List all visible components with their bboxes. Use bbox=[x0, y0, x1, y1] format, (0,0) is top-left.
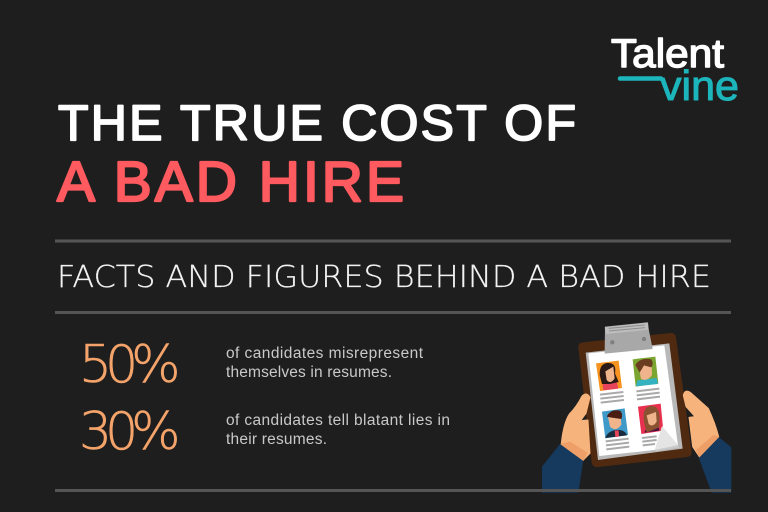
statistic: 30 percent bbox=[79, 402, 450, 462]
logo: Talent Vine bbox=[611, 32, 739, 109]
paper bbox=[588, 345, 678, 456]
illustration: hands holding clipboard of resumes bbox=[542, 322, 731, 493]
divider bottom bbox=[55, 489, 731, 492]
statistic: 30 percent: of candidates tell blatant lies in bbox=[226, 412, 450, 429]
statistic: 50 percent: of candidates misrepresent bbox=[226, 345, 424, 362]
clipboard board bbox=[578, 333, 692, 467]
page curl bbox=[655, 426, 678, 450]
portrait: man green bbox=[633, 357, 658, 387]
statistic: 50 percent: 50% bbox=[79, 335, 177, 395]
logo: Talent Vine: Talent bbox=[611, 32, 724, 76]
left hand bbox=[561, 394, 590, 460]
divider middle bbox=[55, 311, 731, 314]
right hand bbox=[683, 391, 719, 457]
statistic: 30 percent: 30% bbox=[79, 402, 177, 462]
portrait: man blue bbox=[602, 408, 628, 438]
statistic: 30 percent: their resumes. bbox=[226, 431, 327, 448]
clip bbox=[605, 322, 653, 354]
divider top bbox=[55, 240, 731, 242]
subtitle: FACTS AND FIGURES BEHIND A BAD HIRE bbox=[57, 260, 711, 295]
resume text lines bbox=[600, 389, 660, 449]
sleeves bbox=[542, 444, 583, 493]
paper stack bbox=[586, 343, 683, 460]
title line one: THE TRUE COST OF bbox=[58, 95, 576, 151]
statistic: 50 percent: themselves in resumes. bbox=[226, 364, 392, 381]
portrait: woman red bbox=[638, 404, 663, 434]
statistic: 50 percent bbox=[79, 335, 424, 395]
title line two: A BAD HIRE bbox=[57, 150, 404, 214]
logo: Talent Vine: vine bbox=[660, 62, 739, 109]
portrait: woman orange bbox=[596, 361, 622, 391]
